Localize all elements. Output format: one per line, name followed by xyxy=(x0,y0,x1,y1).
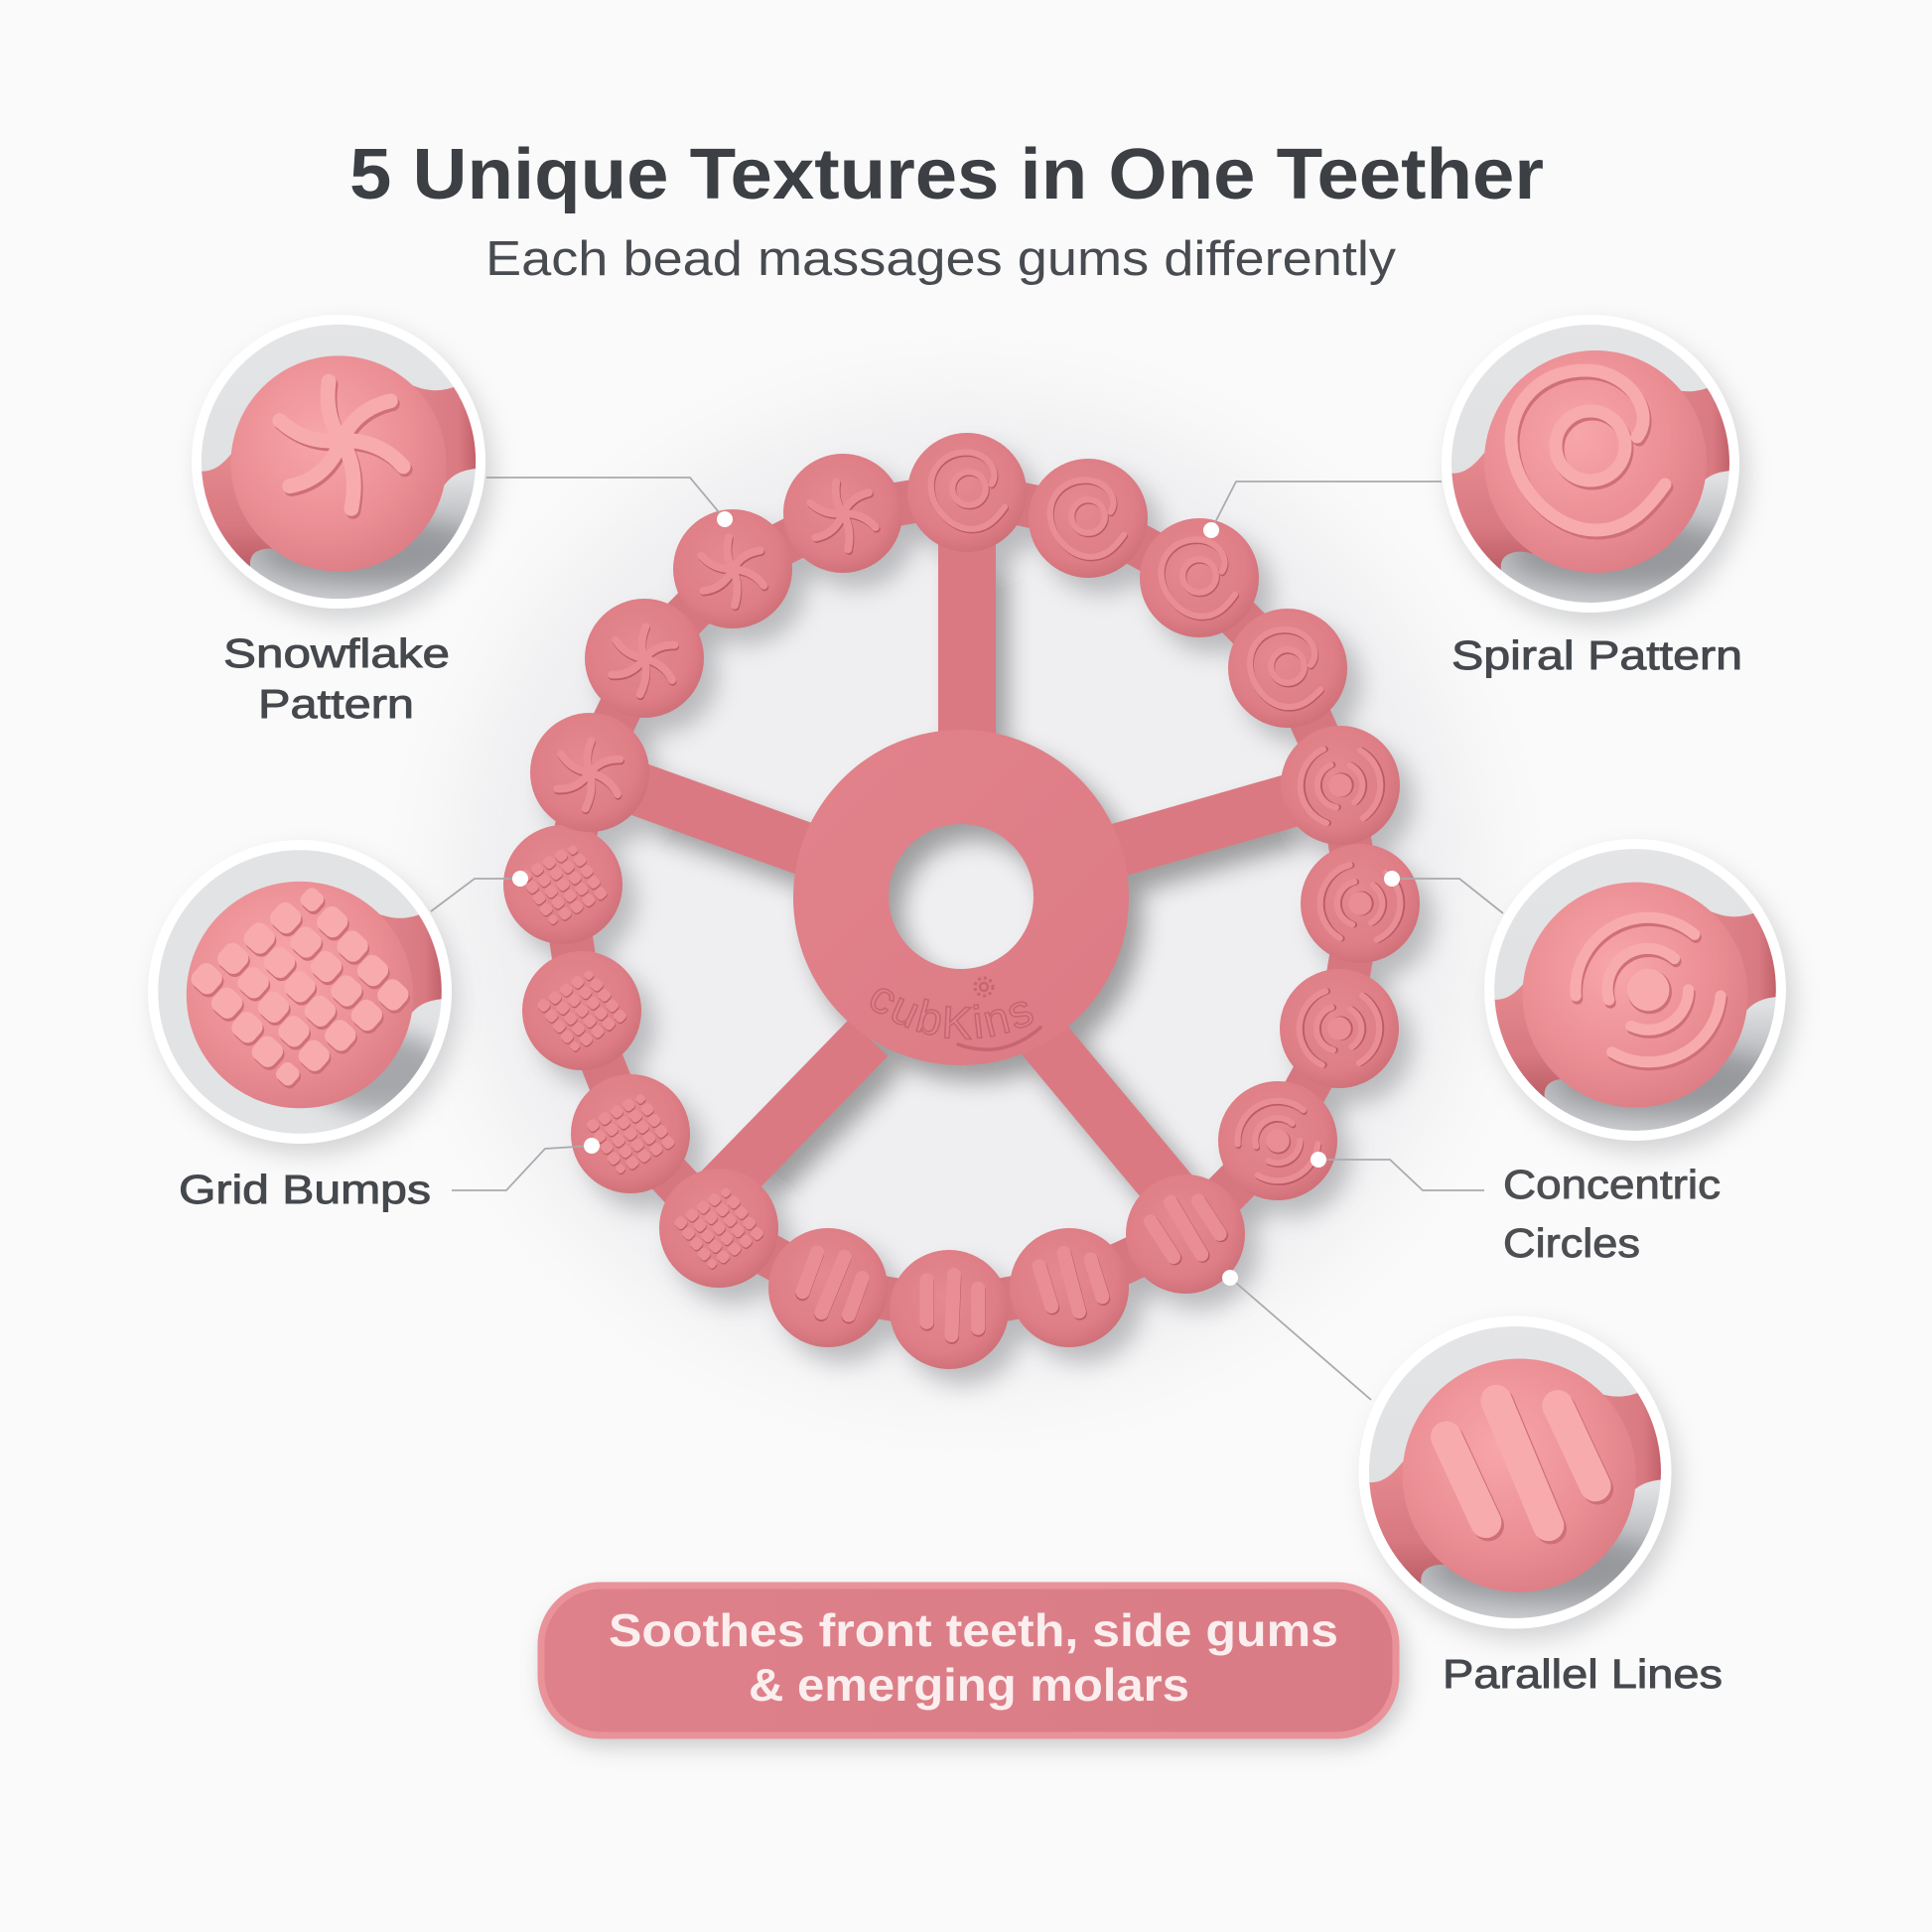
bead connector ring xyxy=(563,492,1360,1310)
teether product xyxy=(503,433,1420,1369)
label: concentric circles: Circles xyxy=(1503,1220,1640,1266)
subtitle: Each bead massages gums differently xyxy=(485,232,1397,286)
label: snowflake pattern xyxy=(223,630,450,727)
label: concentric circles xyxy=(1503,1162,1721,1266)
label: concentric circles: Concentric xyxy=(1503,1162,1721,1207)
callout pill: Soothes front teeth, side gums xyxy=(609,1604,1338,1656)
callout inset: concentric circles xyxy=(1484,839,1794,1153)
label: grid bumps: Grid Bumps xyxy=(179,1167,431,1212)
beads: grid bumps xyxy=(503,825,778,1288)
callout pill xyxy=(541,1586,1404,1745)
central hub ring xyxy=(793,730,1129,1065)
label: parallel lines: Parallel Lines xyxy=(1443,1651,1723,1697)
connector: spiral xyxy=(1203,482,1442,538)
connector: grid bumps label xyxy=(452,1138,600,1190)
beads: concentric circles xyxy=(1218,726,1420,1200)
teether shadow xyxy=(517,449,1434,1385)
connector: concentric label xyxy=(1311,1152,1484,1190)
connector: parallel lines xyxy=(1222,1270,1371,1400)
beads: spiral pattern xyxy=(907,433,1347,728)
spokes xyxy=(606,516,1330,1216)
callout inset: snowflake xyxy=(192,315,493,621)
label: spiral pattern: Spiral Pattern xyxy=(1451,632,1742,678)
label: snowflake pattern: Snowflake xyxy=(223,630,450,676)
brand logo: cubKins xyxy=(870,988,1034,1040)
label: snowflake pattern: Pattern xyxy=(258,681,414,727)
beads: parallel lines xyxy=(768,1174,1245,1369)
callout pill: & emerging molars xyxy=(749,1659,1189,1711)
connector: concentric upper xyxy=(1384,871,1503,913)
callout inset: parallel lines xyxy=(1358,1316,1679,1640)
connector: snowflake xyxy=(486,478,733,527)
title: 5 Unique Textures in One Teether xyxy=(349,135,1544,214)
beads: snowflake pattern xyxy=(530,454,902,832)
callout inset: grid bumps xyxy=(148,840,459,1155)
connector: grid bumps upper xyxy=(431,871,528,911)
callout inset: spiral xyxy=(1442,315,1747,624)
infographic canvas xyxy=(148,147,1803,1757)
